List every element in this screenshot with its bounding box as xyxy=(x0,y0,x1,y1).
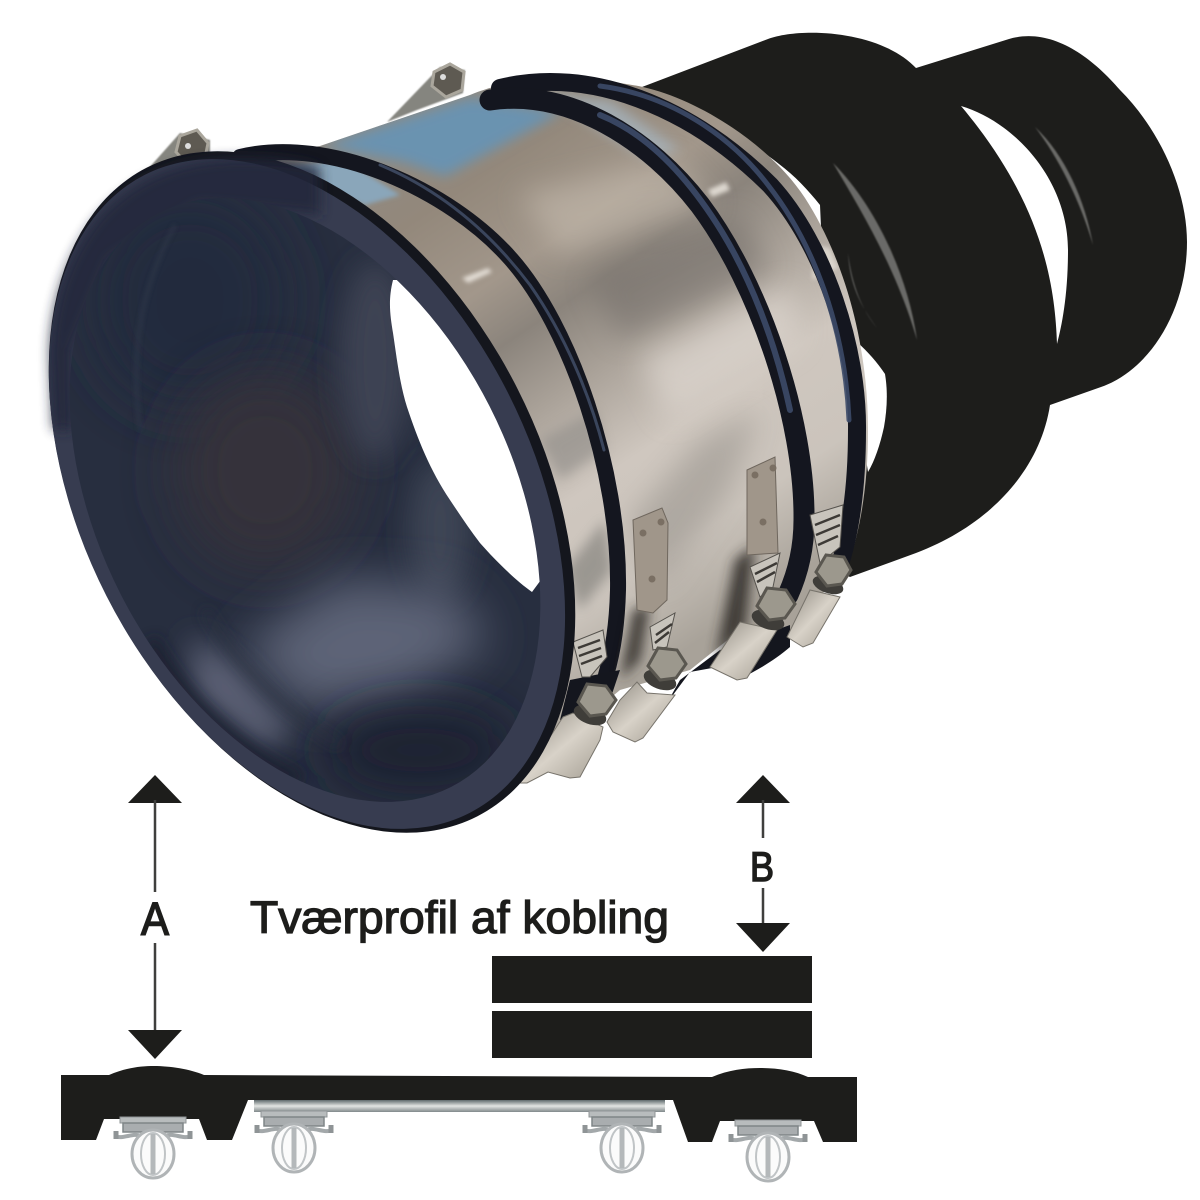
white gaps between coupling and pipe xyxy=(731,135,887,472)
clamp housings xyxy=(520,590,840,783)
tab rivets xyxy=(640,464,776,582)
icon: black pipe behind coupling xyxy=(642,33,1187,577)
icon: lower hose clamps xyxy=(520,457,851,783)
heading: cross-section title: Tværprofil af kobling xyxy=(250,892,669,943)
icon: top clamp right xyxy=(387,64,465,122)
icon: two black bars xyxy=(492,956,812,1058)
band slots xyxy=(578,515,840,664)
label B: B xyxy=(750,843,774,890)
profile clamp 1 xyxy=(115,1117,191,1178)
clamp bolts xyxy=(571,555,851,729)
pipe highlights xyxy=(833,127,1093,340)
panel: coupling interior xyxy=(70,202,540,802)
arrow: dimension B xyxy=(736,775,790,952)
profile clamp 2 xyxy=(256,1111,332,1172)
profile clamp 3 xyxy=(584,1111,660,1172)
far-end opening xyxy=(390,280,540,592)
pipe inner opening xyxy=(961,106,1068,344)
rim darker top-left section xyxy=(50,158,320,430)
panel: stainless steel sleeve xyxy=(225,78,868,740)
panel: rubber front rim xyxy=(0,63,682,921)
slotted bands xyxy=(573,505,843,677)
rubber bands on sleeve xyxy=(240,82,857,675)
clamp tabs xyxy=(633,457,778,613)
icon: top clamp left xyxy=(132,130,228,187)
chart: coupling cross-section profile xyxy=(61,1066,857,1181)
label A: A xyxy=(141,893,169,945)
rim blue-grey face xyxy=(0,73,670,915)
profile clamp 4 xyxy=(730,1120,806,1181)
steel rail xyxy=(254,1100,665,1112)
steel reflections xyxy=(270,92,838,610)
arrow: dimension A xyxy=(128,775,182,1059)
